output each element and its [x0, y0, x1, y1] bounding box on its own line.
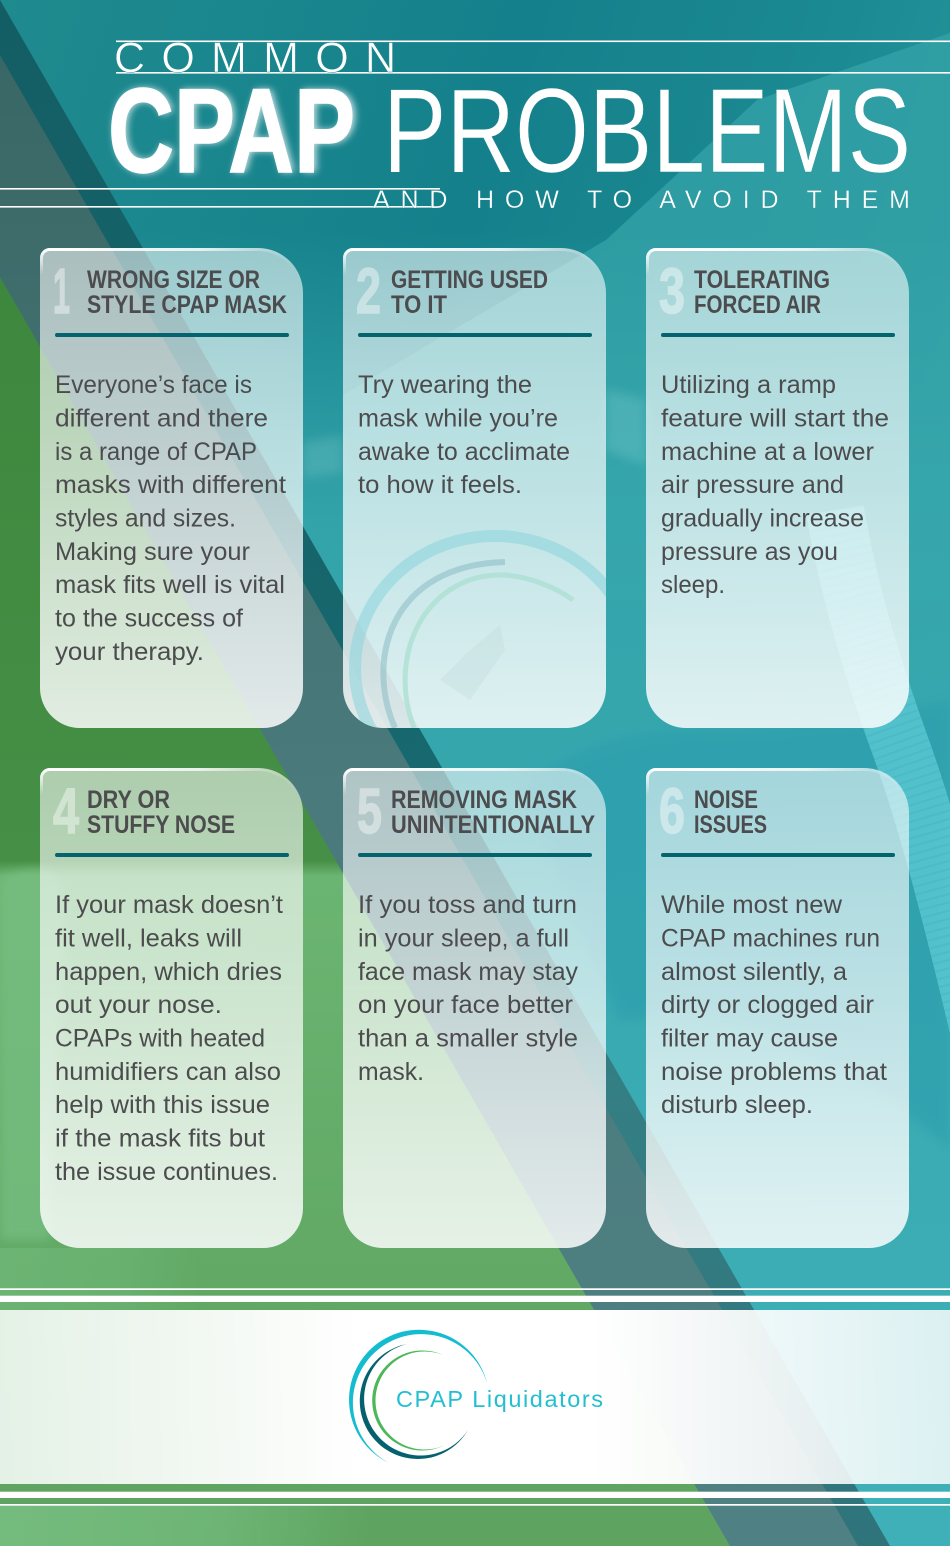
- text block 4: [55, 892, 283, 1186]
- text block 1: mask fits well is vital: [55, 572, 285, 599]
- text block 6: noise problems that: [661, 1059, 887, 1086]
- panel: card 4: [40, 768, 303, 1248]
- heading 1: [87, 266, 287, 319]
- text block 1: Everyone’s face is: [55, 372, 252, 399]
- text block 3: air pressure and: [661, 472, 844, 499]
- text block 5: in your sleep, a full: [358, 925, 569, 952]
- panel: card 2: [343, 248, 606, 728]
- heading 6: [694, 786, 767, 839]
- heading 2: TO IT: [391, 291, 447, 319]
- text block 5: than a smaller style: [358, 1026, 578, 1052]
- number 2: 2: [356, 255, 381, 327]
- text block 1: styles and sizes.: [55, 506, 236, 532]
- heading 2: [391, 266, 548, 319]
- text block 4: humidifiers can also: [55, 1059, 281, 1086]
- heading 2: GETTING USED: [391, 266, 548, 294]
- text block 6: disturb sleep.: [661, 1092, 813, 1119]
- text block 1: [55, 372, 286, 666]
- number 5: 5: [357, 775, 382, 847]
- text block 6: almost silently, a: [661, 959, 847, 986]
- heading 4: STUFFY NOSE: [87, 811, 235, 839]
- heading 5: [391, 786, 595, 839]
- heading 5: REMOVING MASK: [391, 786, 577, 814]
- text block 2: mask while you’re: [358, 405, 558, 432]
- text block 5: on your face better: [358, 992, 573, 1019]
- text block 3: Utilizing a ramp: [661, 372, 836, 399]
- text block 1: your therapy.: [55, 639, 204, 666]
- text block 4: If your mask doesn’t: [55, 892, 283, 919]
- text block 4: the issue continues.: [55, 1159, 278, 1186]
- text block 3: feature will start the: [661, 405, 889, 432]
- number 6: 6: [659, 775, 685, 847]
- text block 5: [358, 892, 579, 1086]
- heading: CPAP: CPAP: [108, 64, 355, 198]
- text block 2: Try wearing the: [358, 372, 532, 399]
- title lines top: [116, 40, 950, 74]
- text block 4: fit well, leaks will: [55, 925, 242, 952]
- text block 2: awake to acclimate: [358, 439, 570, 466]
- text block 1: to the success of: [55, 606, 243, 633]
- text block 1: is a range of CPAP: [55, 439, 257, 466]
- text block 1: Making sure your: [55, 539, 250, 566]
- text block 3: sleep.: [661, 572, 725, 599]
- heading 6: ISSUES: [694, 811, 767, 839]
- title block: [0, 34, 950, 214]
- heading 4: DRY OR: [87, 786, 170, 814]
- text block 6: [661, 892, 887, 1119]
- number 3: 3: [659, 255, 685, 327]
- text block 2: to how it feels.: [358, 472, 522, 499]
- text block 1: different and there: [55, 405, 268, 432]
- text block 2: [358, 372, 570, 499]
- text block 4: happen, which dries: [55, 959, 282, 986]
- heading 1: WRONG SIZE OR: [87, 266, 260, 294]
- text block 3: gradually increase: [661, 506, 864, 532]
- panel: card 1: 1: [53, 255, 70, 327]
- panel: card 6: [646, 768, 909, 1248]
- watermark logo arcs: [349, 530, 606, 728]
- logo text: CPAP Liquidators: [396, 1386, 603, 1412]
- logo: [349, 1330, 603, 1463]
- heading glow: CPAP: CPAP: [110, 64, 358, 198]
- text block 6: dirty or clogged air: [661, 992, 874, 1019]
- text block 6: CPAP machines run: [661, 925, 880, 952]
- text block 5: face mask may stay: [358, 959, 579, 986]
- text block 3: [661, 372, 889, 599]
- heading 3: TOLERATING: [694, 266, 830, 294]
- heading 1: STYLE CPAP MASK: [87, 291, 287, 319]
- text block 5: mask.: [358, 1059, 424, 1086]
- number 4: 4: [53, 775, 79, 847]
- text block 3: machine at a lower: [661, 439, 874, 466]
- heading 3: FORCED AIR: [694, 291, 821, 319]
- heading 6: NOISE: [694, 786, 758, 814]
- text block 3: pressure as you: [661, 539, 838, 566]
- panel: card 3: [646, 248, 909, 728]
- footer band: [0, 1288, 950, 1506]
- text block 4: out your nose.: [55, 992, 222, 1019]
- panel: card 1: [40, 248, 303, 728]
- heading: COMMON: COMMON: [114, 34, 396, 82]
- text block 4: if the mask fits but: [55, 1126, 265, 1153]
- heading 4: [87, 786, 235, 839]
- heading 5: UNINTENTIONALLY: [391, 811, 595, 839]
- text block 4: help with this issue: [55, 1092, 270, 1119]
- panel: card 5: [343, 768, 606, 1248]
- text block 6: filter may cause: [661, 1026, 838, 1052]
- text block 6: While most new: [661, 892, 842, 919]
- subheading: AND HOW TO AVOID THEM: [373, 186, 910, 214]
- heading 3: [694, 266, 830, 319]
- text block 1: masks with different: [55, 472, 286, 499]
- text block 5: If you toss and turn: [358, 892, 577, 919]
- title lines bottom: [0, 188, 440, 208]
- text block 4: CPAPs with heated: [55, 1026, 265, 1052]
- icon: logo arcs: [349, 1330, 487, 1463]
